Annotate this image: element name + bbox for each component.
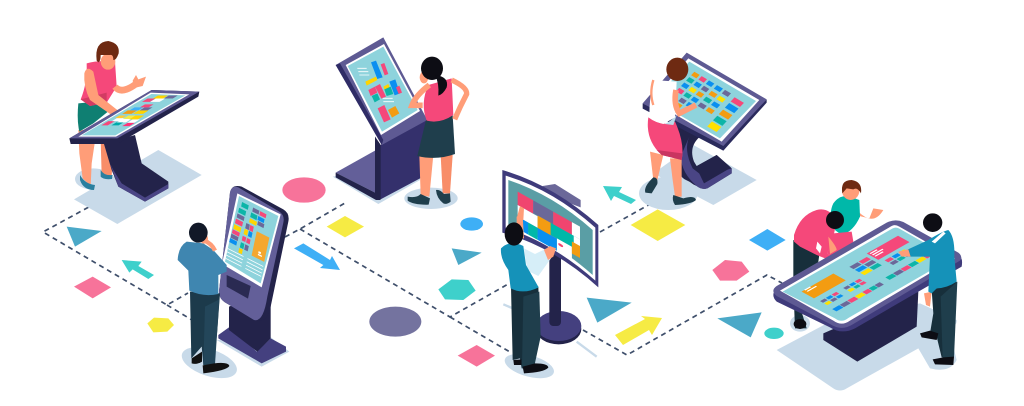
floating shapes: right group bbox=[631, 209, 786, 339]
scene: man at curved display bbox=[501, 170, 598, 383]
man bbox=[501, 206, 556, 373]
pink diamond bbox=[74, 277, 111, 298]
card slot bbox=[227, 275, 251, 299]
kiosk shadow bbox=[217, 337, 289, 367]
table top bbox=[773, 220, 962, 331]
scene: woman at tall kiosk bbox=[333, 37, 467, 209]
stand bbox=[675, 123, 732, 189]
purple ellipse bbox=[369, 307, 421, 337]
woman bbox=[408, 57, 467, 205]
woman bbox=[78, 41, 146, 190]
kiosk base and stand bbox=[336, 119, 427, 200]
charts bbox=[357, 61, 402, 122]
stand bbox=[536, 250, 581, 344]
kiosk body bbox=[219, 186, 289, 321]
man shadow bbox=[178, 341, 241, 384]
top teal arrow bbox=[603, 186, 636, 204]
tilted panel bbox=[643, 53, 767, 151]
scene: group of three at large touch table bbox=[773, 180, 962, 390]
scene: woman at sloped table, top right bbox=[639, 53, 767, 210]
floor shadow bbox=[653, 145, 757, 205]
yellow diamond bbox=[631, 209, 685, 241]
person shadow bbox=[404, 188, 458, 209]
table top bbox=[69, 90, 199, 144]
floating arrows bbox=[603, 186, 662, 345]
floor shadow bbox=[333, 163, 420, 204]
triangle bbox=[717, 312, 762, 337]
floating shapes: left group bbox=[67, 177, 340, 332]
teal arrow bbox=[122, 260, 154, 279]
shadow lines bbox=[503, 304, 597, 357]
yellow hexagon bbox=[147, 318, 174, 332]
dashed network paths bbox=[43, 183, 782, 355]
teal hexagon bbox=[438, 279, 476, 300]
floating shapes: middle group bbox=[327, 216, 632, 367]
tiles bbox=[518, 192, 580, 264]
man bbox=[178, 223, 229, 373]
kiosk tiles bbox=[226, 200, 274, 276]
person shadow bbox=[75, 168, 112, 190]
table tiles bbox=[800, 236, 934, 311]
kiosk panel bbox=[336, 37, 427, 145]
table stand bbox=[104, 135, 168, 202]
scene: woman at tilted table, top left bbox=[69, 41, 202, 224]
blue ellipse bbox=[460, 217, 483, 231]
table pedestal bbox=[823, 292, 918, 362]
person shadow bbox=[502, 349, 557, 383]
pink hexagon bbox=[712, 260, 749, 281]
shadow under man bbox=[790, 315, 810, 332]
tiles bbox=[666, 72, 745, 132]
kiosk base bbox=[218, 290, 286, 363]
scene: man at upright kiosk bbox=[178, 186, 289, 384]
pink ellipse bbox=[282, 177, 326, 203]
blue diamond bbox=[749, 229, 786, 251]
screen bbox=[78, 93, 189, 137]
man in pink bbox=[793, 209, 847, 329]
display back mount bbox=[543, 184, 581, 207]
pink diamond bbox=[458, 345, 495, 367]
man in blue bbox=[898, 213, 957, 365]
yellow arrow bbox=[615, 316, 662, 345]
curved display bbox=[502, 170, 598, 287]
woman behind bbox=[827, 180, 883, 260]
kiosk screen bbox=[346, 44, 420, 135]
kiosk screen bbox=[222, 193, 281, 287]
yellow diamond bbox=[327, 216, 364, 237]
woman bbox=[645, 58, 696, 205]
tiles bbox=[100, 95, 180, 126]
triangle left bbox=[67, 227, 102, 247]
large triangle bbox=[587, 298, 632, 323]
floor shadow bbox=[74, 150, 202, 224]
teal ellipse bbox=[764, 328, 784, 339]
screen bbox=[652, 58, 759, 142]
person shadow bbox=[639, 177, 698, 210]
blue arrow bbox=[294, 243, 340, 270]
small triangle bbox=[452, 248, 482, 265]
floor shadow bbox=[777, 303, 957, 390]
